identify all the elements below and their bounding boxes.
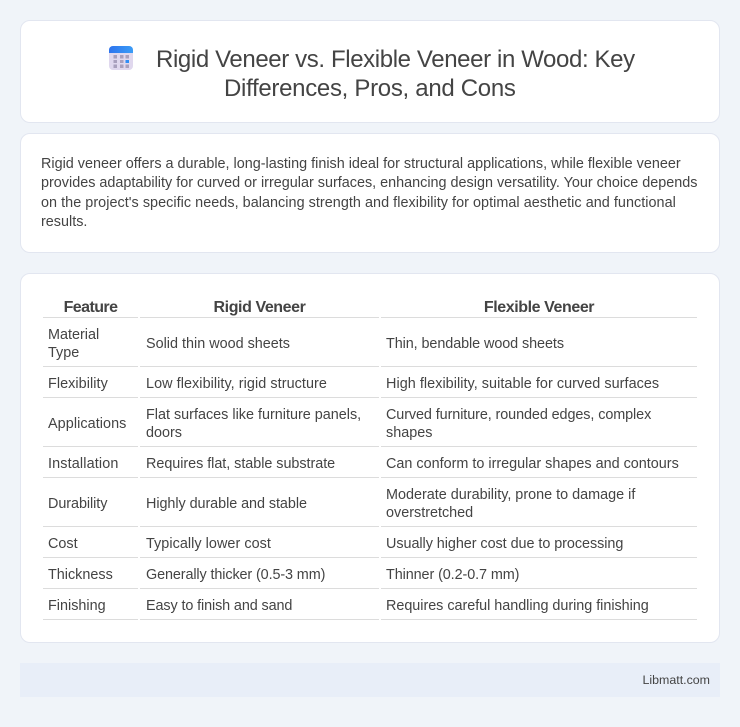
title: Differences, Pros, and Cons <box>224 75 516 102</box>
panel: comparison table: doors <box>146 425 182 441</box>
table header <box>43 299 697 318</box>
panel: comparison table: Flexible Veneer <box>484 299 594 316</box>
row: finishing <box>43 598 697 620</box>
panel: comparison table: Durability <box>48 496 107 512</box>
panel: comparison table: Requires careful handling during finishing <box>386 598 649 614</box>
footer text: Libmatt.com <box>643 673 710 687</box>
panel: comparison table: Low flexibility, rigid structure <box>146 376 327 392</box>
panel: comparison table: Typically lower cost <box>146 536 271 552</box>
panel: header <box>20 20 720 123</box>
panel: comparison table: Highly durable and stable <box>146 496 307 512</box>
panel: comparison table: High flexibility, suitable for curved surfaces <box>386 376 659 392</box>
panel: comparison table: Usually higher cost due to processing <box>386 536 623 552</box>
panel: comparison table: Curved furniture, rounded edges, complex <box>386 407 651 423</box>
title <box>156 46 635 102</box>
row: durability <box>43 487 697 527</box>
text block: introduction: on the project's specific needs, balancing strength and flexibility for optimal aesthetic and functional <box>41 195 676 211</box>
panel: comparison table: Rigid Veneer <box>214 299 305 316</box>
panel: comparison table: Generally thicker (0.5-3 mm) <box>146 567 325 583</box>
panel: comparison table: overstretched <box>386 505 473 521</box>
row: thickness <box>43 567 697 589</box>
row: installation <box>43 456 697 478</box>
panel: comparison table: Installation <box>48 456 118 472</box>
text block: introduction: results. <box>41 214 87 230</box>
panel: comparison table: Type <box>48 345 79 361</box>
row: material type <box>43 327 697 367</box>
panel: comparison table: Feature <box>64 299 117 316</box>
text block: introduction <box>41 156 697 230</box>
panel: comparison table: Requires flat, stable substrate <box>146 456 335 472</box>
panel: comparison table: Applications <box>48 416 126 432</box>
panel: comparison table: Thickness <box>48 567 113 583</box>
panel: comparison table: Cost <box>48 536 78 552</box>
text block: introduction: provides adaptability for curved or irregular surfaces, enhancing design versatility. Your choice depends <box>41 175 697 191</box>
panel: comparison table: Finishing <box>48 598 106 614</box>
icon: calendar <box>109 46 133 70</box>
text block: introduction: Rigid veneer offers a durable, long-lasting finish ideal for structural applications, while flexible veneer <box>41 156 681 172</box>
panel: comparison table <box>20 273 720 643</box>
panel: comparison table: Easy to finish and sand <box>146 598 292 614</box>
row: applications <box>43 407 697 447</box>
panel: comparison table: Solid thin wood sheets <box>146 336 290 352</box>
footer bar <box>20 663 720 697</box>
panel: comparison table: Flexibility <box>48 376 108 392</box>
row: cost <box>43 536 697 558</box>
panel: comparison table: Material <box>48 327 99 343</box>
panel: comparison table: Thinner (0.2-0.7 mm) <box>386 567 519 583</box>
panel: comparison table: Moderate durability, prone to damage if <box>386 487 635 503</box>
title: Rigid Veneer vs. Flexible Veneer in Wood: Key <box>156 46 635 73</box>
panel: comparison table: Can conform to irregular shapes and contours <box>386 456 679 472</box>
row: flexibility <box>43 376 697 398</box>
panel: introduction <box>20 133 720 253</box>
panel: comparison table: shapes <box>386 425 432 441</box>
panel: comparison table: Thin, bendable wood sheets <box>386 336 564 352</box>
panel: comparison table: Flat surfaces like furniture panels, <box>146 407 361 423</box>
